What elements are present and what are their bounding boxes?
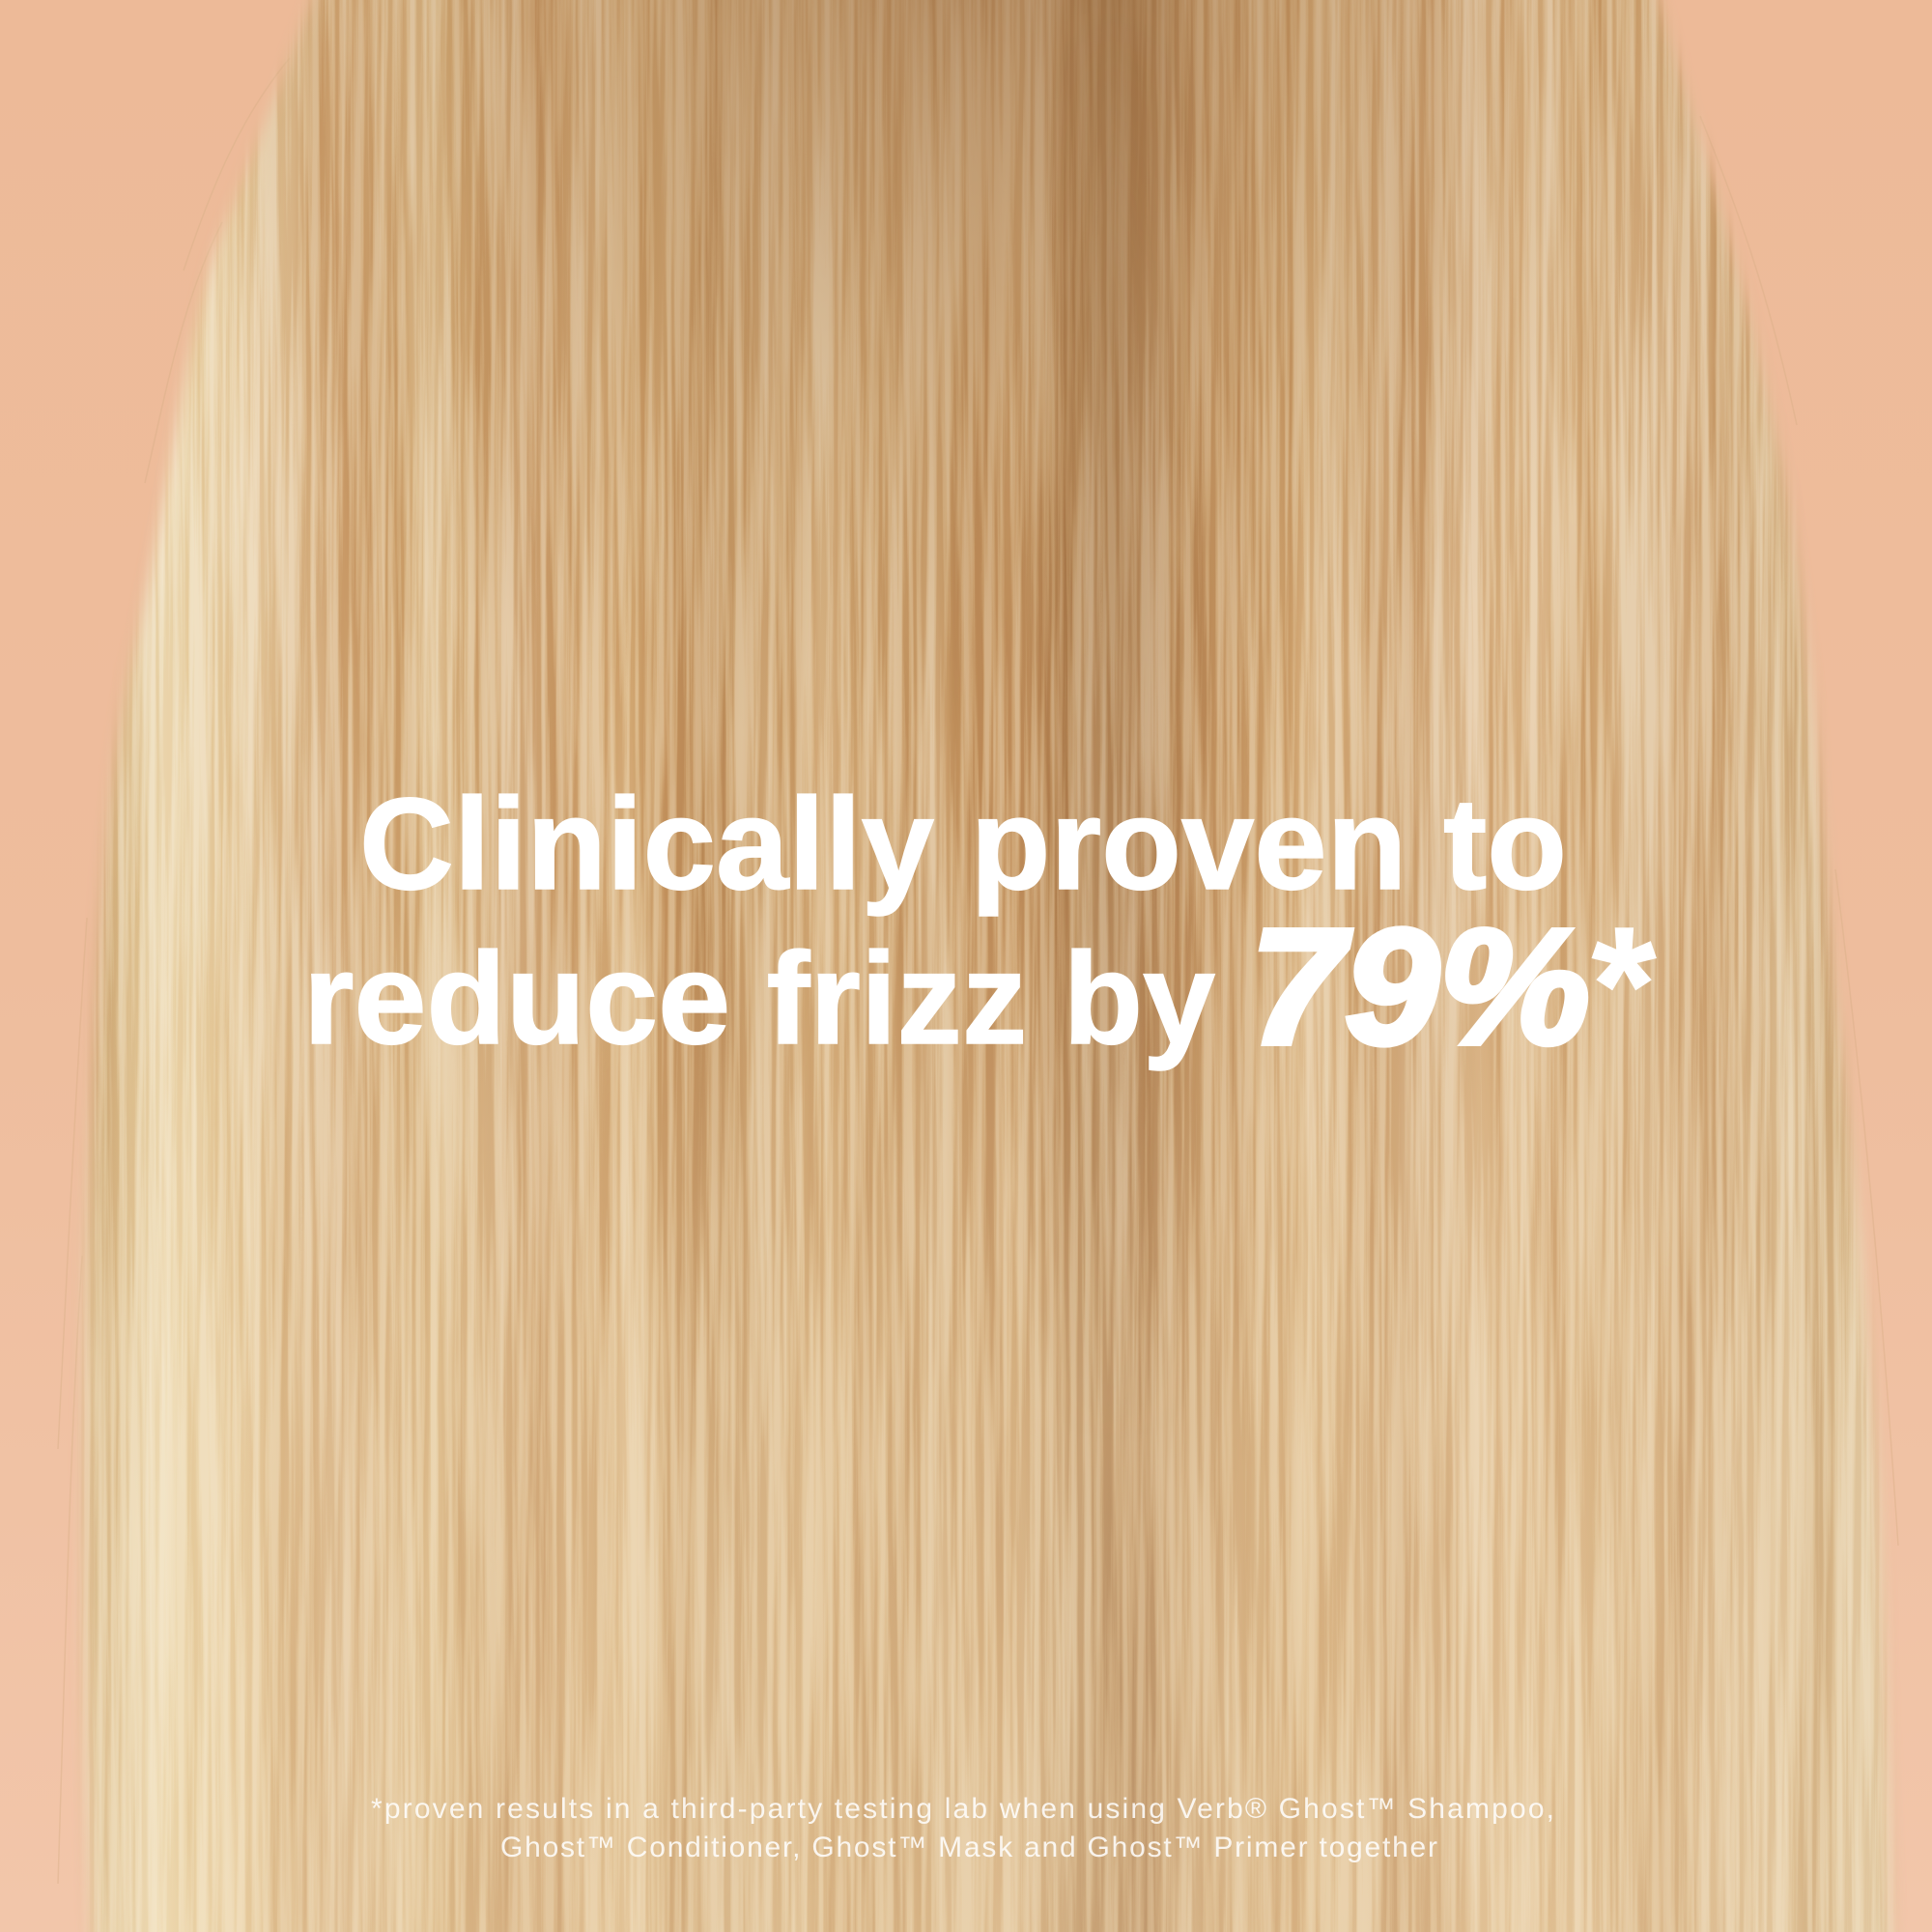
asterisk: *: [1592, 894, 1656, 1077]
headline line 2: reduce frizz by: [303, 925, 1215, 1071]
statistic: 79%: 79%: [1250, 895, 1590, 1079]
footnote line 2: Ghost™ Conditioner, Ghost™ Mask and Ghost™ Primer together: [500, 1832, 1437, 1863]
footnote line 1: *proven results in a third-party testing lab when using Verb® Ghost™ Shampoo,: [371, 1793, 1554, 1825]
dark roots: [298, 0, 1611, 591]
headline: [303, 771, 1656, 1079]
dark centre parting: [1077, 0, 1165, 1030]
headline line 1: Clinically proven to: [359, 771, 1567, 917]
footnote: [371, 1793, 1554, 1863]
